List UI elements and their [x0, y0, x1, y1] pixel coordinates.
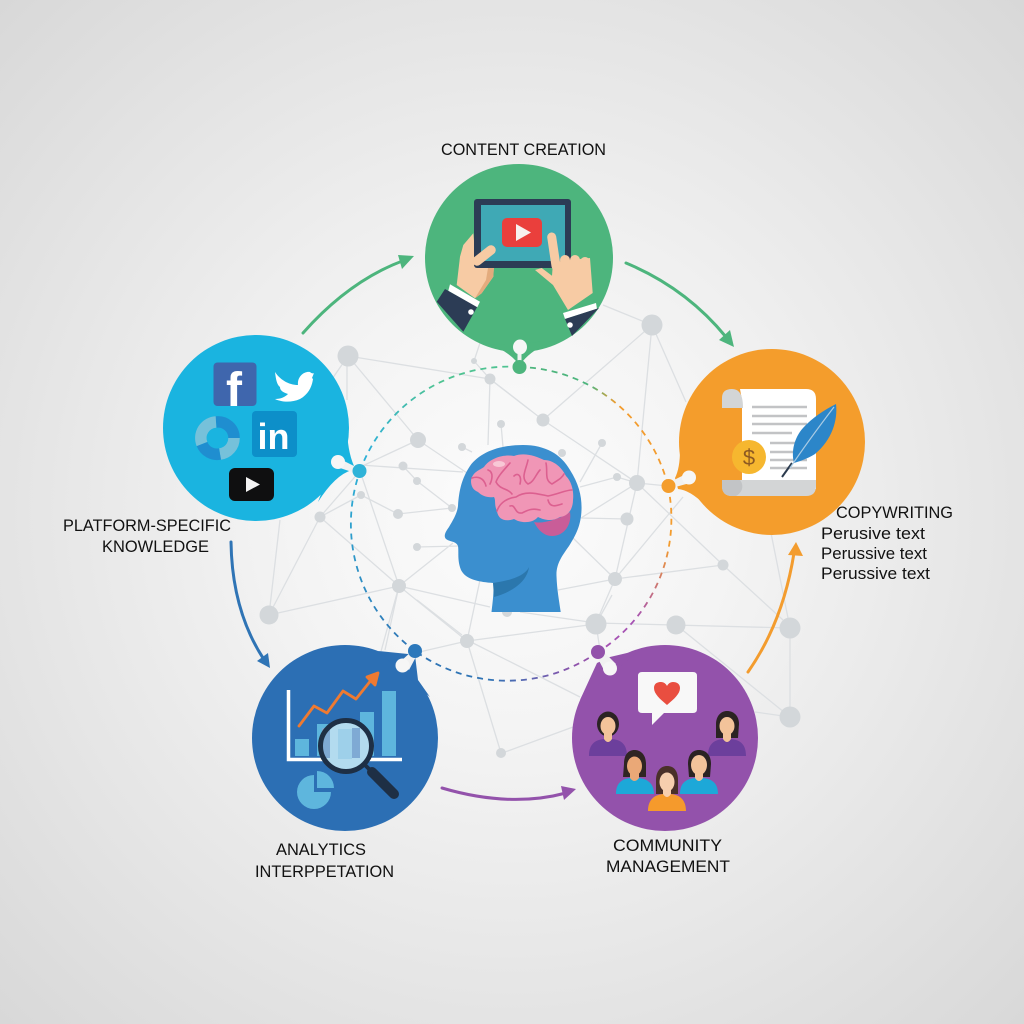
analytics interpretation label: INTERPPETATION [255, 862, 394, 881]
icon: pie chart [297, 771, 334, 809]
icon: dollar coin: $ [743, 445, 755, 470]
connector node [331, 455, 366, 478]
icon: ring chart [201, 422, 234, 454]
icon: right hand [535, 237, 599, 336]
brain [471, 454, 573, 522]
copywriting text block: Perussive text [821, 544, 927, 563]
jaw shadow [493, 567, 529, 597]
arrow: platform to content [303, 255, 414, 333]
icon: feather quill [782, 404, 836, 477]
panel: analytics interpretation [252, 644, 438, 831]
arrow: analytics to community [442, 786, 576, 800]
icon: facebook: f [226, 364, 243, 417]
person 1 [589, 712, 627, 756]
brain highlight [493, 461, 505, 467]
community management label: COMMUNITY [613, 836, 722, 855]
trend line [299, 673, 378, 726]
panel: platform-specific knowledge [163, 335, 366, 521]
arrow: community to copywriting [748, 542, 803, 672]
blue bubble [252, 645, 438, 831]
copywriting text block: Perussive text [821, 564, 930, 583]
connector node [591, 645, 617, 676]
icon: left hand [437, 233, 494, 332]
arrow: content to copywriting [626, 263, 734, 347]
panel: community management [572, 645, 758, 831]
icon: scroll document [722, 389, 816, 496]
connector node [662, 470, 696, 493]
icon: speech bubble with heart [638, 672, 697, 725]
platform-specific knowledge label [63, 516, 231, 556]
icon: linkedin: in [258, 416, 290, 457]
copywriting text block: COPYWRITING [836, 503, 953, 522]
community management label [606, 836, 730, 876]
icon: twitter [275, 372, 314, 402]
icon: facebook [214, 362, 256, 417]
chart axes [288, 690, 402, 760]
bars [295, 691, 396, 756]
dashed central ring [351, 367, 671, 681]
person 4 [680, 750, 718, 794]
copywriting text block: Perusive text [821, 524, 925, 543]
icon: dollar coin [732, 440, 766, 474]
content creation label: CONTENT CREATION [441, 140, 606, 159]
central head with brain [445, 445, 582, 612]
icon: linkedin [252, 411, 297, 457]
person 5 [648, 766, 686, 811]
analytics interpretation label [255, 840, 394, 881]
cycle arrows [231, 255, 803, 800]
brain folds [472, 460, 572, 513]
panel: copywriting [662, 349, 865, 535]
cyan bubble [163, 335, 354, 521]
icon: magnifying glass [320, 720, 394, 794]
analytics interpretation label: ANALYTICS [276, 840, 366, 859]
person 3 [616, 750, 654, 794]
icon: youtube [229, 468, 274, 501]
platform-specific knowledge label: PLATFORM-SPECIFIC [63, 516, 231, 535]
green bubble [425, 164, 613, 361]
icon: tablet with video [474, 199, 571, 268]
community management label: MANAGEMENT [606, 857, 730, 876]
icon: left thumb [477, 250, 491, 261]
panel: content creation [425, 164, 613, 374]
platform-specific knowledge label: KNOWLEDGE [102, 537, 209, 556]
arrow: platform to analytics [231, 542, 270, 668]
connector node [396, 644, 422, 672]
connector node [512, 340, 527, 374]
head silhouette [445, 445, 582, 612]
person 2 [708, 711, 746, 756]
copywriting text block [821, 503, 953, 583]
cerebellum [534, 512, 570, 536]
network graph background [260, 305, 800, 758]
orange bubble [675, 349, 865, 535]
purple bubble [572, 645, 758, 831]
